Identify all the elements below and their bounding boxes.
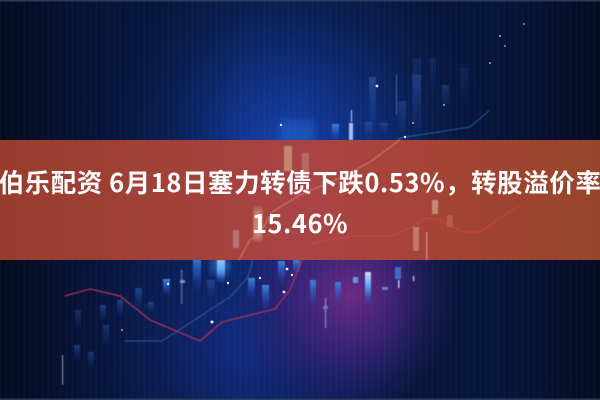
blue trend line (125, 110, 490, 341)
red trend line (65, 245, 310, 341)
candlesticks lower (62, 255, 414, 385)
headline band (0, 140, 600, 260)
candlesticks upper (280, 58, 468, 150)
title (0, 163, 600, 241)
chart details seen through band (233, 140, 520, 260)
title: 伯乐配资 6月18日塞力转债下跌0.53%，转股溢价率 (0, 163, 600, 200)
title: 15.46% (252, 204, 348, 241)
glowing dots (121, 23, 525, 331)
